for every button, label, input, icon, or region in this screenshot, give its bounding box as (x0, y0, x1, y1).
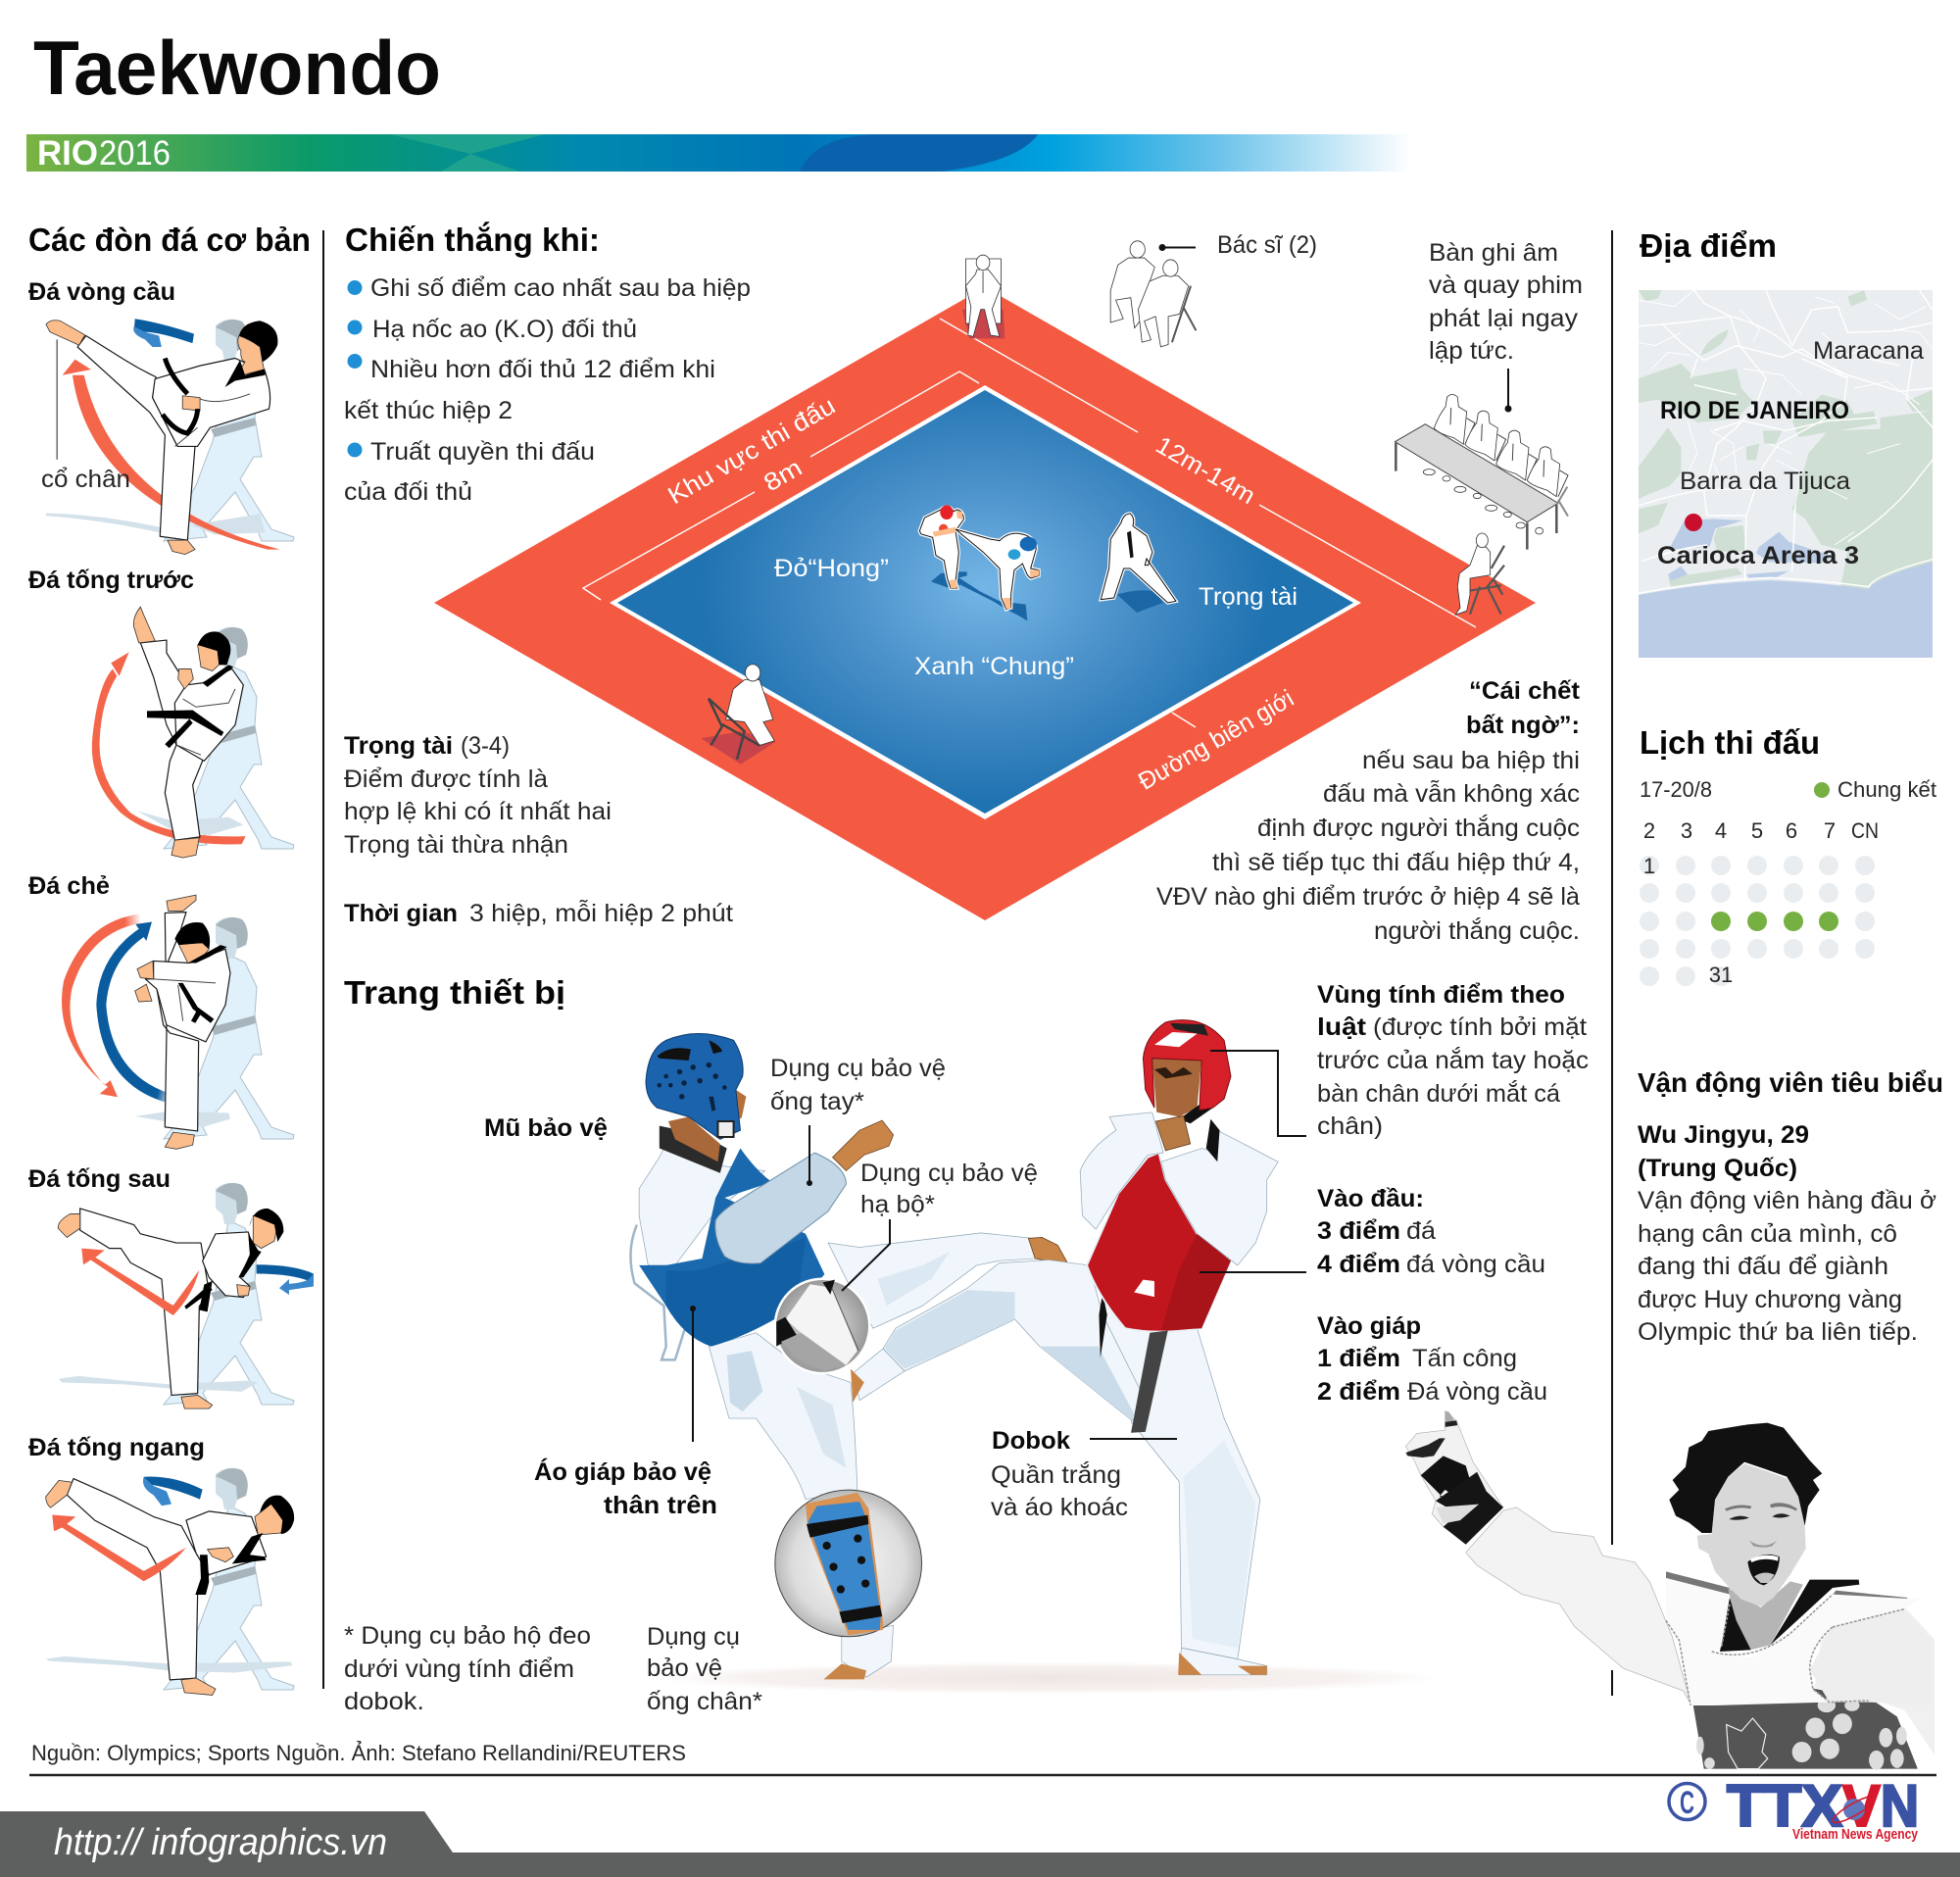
court label: boundary line: Đường biên giới (1134, 684, 1298, 796)
figure: side kick (46, 1468, 294, 1695)
logo: TTXVN: V (1842, 1773, 1881, 1839)
text: referee note: (3-4) (461, 732, 510, 760)
heading: schedule: Lịch thi đấu (1640, 724, 1820, 761)
recording table and judges (1395, 394, 1568, 550)
text: athlete bio: Wu Jingyu, 29 (1638, 1121, 1809, 1149)
court label: red: Đỏ“Hong” (774, 555, 889, 582)
doctors (1110, 241, 1196, 347)
label: chest protector: thân trên (604, 1492, 717, 1519)
label: helmet: Mũ bảo vệ (484, 1114, 608, 1142)
text: sudden death: VĐV nào ghi điểm trước ở hiệp 4 sẽ là (1156, 883, 1580, 911)
text: sudden death: “Cái chết (1469, 677, 1581, 705)
text: scoring zone: luật (1317, 1013, 1367, 1041)
label: groin guard (842, 1160, 1038, 1291)
text: head points: 4 điểm (1317, 1251, 1400, 1278)
text: sudden death: người thắng cuộc. (1374, 916, 1580, 945)
text: head points: đá (1406, 1217, 1436, 1245)
divider: right column (1611, 230, 1613, 1696)
text: armor points: Tấn công (1412, 1345, 1517, 1372)
label: recording table: phát lại ngay (1429, 305, 1579, 332)
text: athlete bio: Vận động viên hàng đầu ở (1638, 1187, 1936, 1214)
text: sudden death: định được người thắng cuộc (1257, 814, 1580, 842)
figure: roundhouse kick (41, 319, 294, 555)
text: head points (1317, 1185, 1545, 1278)
court diagram (434, 241, 1568, 920)
footer band: http:// infographics.vn (54, 1822, 387, 1863)
note: protective gear: * Dụng cụ bảo hộ đeo (344, 1622, 591, 1650)
figure: roundhouse kick: cổ chân (41, 466, 130, 493)
text: scoring zone: Vùng tính điểm theo (1317, 981, 1565, 1009)
text: referee note: Điểm được tính là (344, 766, 548, 793)
text: scoring zone: chân) (1317, 1112, 1383, 1140)
label: recording table: Bàn ghi âm (1429, 239, 1558, 267)
figure: axe kick (62, 895, 294, 1149)
list: winning conditions: Hạ nốc ao (K.O) đối thủ (372, 316, 637, 343)
schedule calendar: 3 (1681, 818, 1692, 843)
text: armor points: Đá vòng cầu (1407, 1378, 1547, 1406)
label: shin guard: Dụng cụ (647, 1623, 740, 1651)
label: side kick: Đá tống ngang (28, 1434, 205, 1461)
text: referee note: Trọng tài (344, 732, 453, 760)
heading: winning conditions: Chiến thắng khi: (345, 222, 600, 258)
text: head points: Vào đầu: (1317, 1185, 1424, 1212)
court label: blue: Xanh “Chung” (914, 653, 1074, 680)
schedule calendar: 2 (1643, 818, 1655, 843)
court figures (701, 241, 1196, 765)
judge top (962, 255, 1004, 338)
note: protective gear: dobok. (344, 1688, 424, 1715)
judge bottom-left (701, 665, 776, 765)
text: scoring zone: bàn chân dưới mắt cá (1317, 1079, 1560, 1108)
label: dobok (991, 1427, 1177, 1521)
label: shin guard (647, 1623, 762, 1715)
source: Nguồn: Olympics; Sports Nguồn. Ảnh: Stefano Rellandini/REUTERS (31, 1741, 686, 1765)
text: time (344, 899, 733, 927)
map: RIO DE JANEIRO (1660, 397, 1849, 424)
label: doctors (1158, 231, 1317, 259)
text: referee note: hợp lệ khi có ít nhất hai (344, 798, 612, 825)
text: head points: đá vòng cầu (1406, 1251, 1545, 1278)
list: winning conditions: kết thúc hiệp 2 (344, 397, 513, 424)
text: time: Thời gian (344, 900, 458, 927)
banner: Rio 2016 (26, 134, 1411, 173)
inset: shin guard (775, 1490, 922, 1637)
text: referee note: Trọng tài thừa nhận (344, 831, 568, 859)
text: sudden death: nếu sau ba hiệp thi (1362, 747, 1580, 774)
text: armor points: 1 điểm (1317, 1345, 1400, 1372)
court label: 8m: 8m (760, 454, 807, 497)
text: athlete bio: (Trung Quốc) (1638, 1155, 1797, 1182)
label: dobok: và áo khoác (991, 1494, 1128, 1521)
text: scoring zone (1317, 981, 1589, 1140)
text: athlete bio: hạng cân của mình, cô (1638, 1220, 1897, 1248)
figure: front kick (92, 607, 294, 858)
text: sudden death: đấu mà vẫn không xác (1323, 779, 1580, 808)
list: winning conditions: Nhiều hơn đối thủ 12 điểm khi (370, 356, 715, 383)
heading: venue: Địa điểm (1640, 227, 1777, 264)
logo: copyright (1669, 1784, 1705, 1820)
note: protective gear: dưới vùng tính điểm (344, 1655, 574, 1683)
label: forearm guard (770, 1055, 946, 1186)
map: Barra da Tijuca (1680, 468, 1850, 495)
text: time: 3 hiệp, mỗi hiệp 2 phút (469, 899, 733, 927)
inset: groin guard (775, 1279, 869, 1373)
label: shin guard: bảo vệ (647, 1655, 722, 1682)
label: recording table: và quay phim (1429, 272, 1583, 299)
schedule calendar: Chung kết (1838, 777, 1936, 802)
label: dobok: Dobok (992, 1427, 1070, 1455)
schedule calendar: 7 (1824, 818, 1836, 843)
label: roundhouse kick: Đá vòng cầu (28, 278, 175, 306)
logo: TTXVN: TTX (1727, 1773, 1842, 1839)
text: athlete bio: được Huy chương vàng (1638, 1286, 1902, 1313)
heading: featured athlete: Vận động viên tiêu biểu (1638, 1067, 1943, 1098)
banner: Rio 2016: 2016 (99, 134, 171, 173)
title: Taekwondo (33, 25, 441, 111)
label: axe kick: Đá chẻ (28, 872, 110, 900)
schedule calendar: 17-20/8 (1640, 777, 1712, 802)
banner: Rio 2016: RIO (37, 134, 98, 173)
label: chest protector (534, 1306, 717, 1519)
list: winning conditions: Ghi số điểm cao nhất sau ba hiệp (370, 274, 751, 302)
text: sudden death: thì sẽ tiếp tục thi đấu hiệp thứ 4, (1212, 849, 1580, 876)
text: head points: 3 điểm (1317, 1217, 1400, 1245)
text: athlete bio (1638, 1121, 1936, 1346)
court label: competition area: Khu vực thi đấu (663, 392, 840, 510)
schedule calendar: 4 (1715, 818, 1727, 843)
text: athlete bio: Olympic thứ ba liên tiếp. (1638, 1318, 1918, 1346)
leader: scoring zone (1210, 1051, 1306, 1136)
label: chest protector: Áo giáp bảo vệ (534, 1457, 711, 1486)
map: Maracana (1813, 337, 1924, 365)
heading: equipment: Trang thiết bị (344, 974, 565, 1011)
schedule calendar: 1 (1643, 854, 1655, 878)
schedule calendar (1640, 777, 1936, 987)
divider: left column (322, 230, 324, 1689)
schedule calendar: CN (1851, 818, 1879, 843)
schedule calendar: 6 (1786, 818, 1797, 843)
judge right (1455, 533, 1504, 615)
map (1639, 290, 1933, 658)
text: athlete bio: đang thi đấu để giành (1638, 1253, 1888, 1280)
list: winning conditions: Truất quyền thi đấu (370, 438, 595, 466)
illustration: blue fighter (630, 1033, 1069, 1679)
text: sudden death (1156, 677, 1581, 945)
court label: referee: Trọng tài (1199, 583, 1298, 611)
text: scoring zone: trước của nắm tay hoặc (1317, 1046, 1589, 1074)
text: scoring zone: (được tính bởi mặt (1373, 1013, 1587, 1041)
label: forearm guard: Dụng cụ bảo vệ (770, 1055, 946, 1082)
schedule calendar: 5 (1751, 818, 1763, 843)
label: groin guard: Dụng cụ bảo vệ (860, 1160, 1038, 1187)
logo: TTXVN: N (1881, 1773, 1919, 1839)
leader: body armor (1200, 1271, 1306, 1273)
label: shin guard: ống chân* (647, 1688, 762, 1715)
court label: 12m-14m: 12m-14m (1152, 431, 1259, 510)
label: recording table (1429, 239, 1583, 412)
label: back kick: Đá tống sau (28, 1165, 171, 1193)
label: front kick: Đá tống trước (28, 567, 194, 594)
illustration: red fighter (851, 1020, 1278, 1675)
list: winning conditions (344, 274, 751, 506)
text: armor points: 2 điểm (1317, 1378, 1400, 1406)
text: referee note (344, 732, 612, 859)
footer rule (29, 1774, 1936, 1776)
schedule calendar: 31 (1709, 963, 1733, 987)
map: Carioca Arena 3 (1657, 542, 1859, 569)
text: sudden death: bất ngờ”: (1466, 712, 1580, 739)
photo: athlete (1405, 1410, 1935, 1770)
text: armor points: Vào giáp (1317, 1312, 1421, 1340)
label: groin guard: hạ bộ* (860, 1191, 935, 1218)
text: armor points (1317, 1312, 1547, 1406)
heading: basic kicks: Các đòn đá cơ bản (28, 222, 311, 258)
logo: copyright: C (1680, 1785, 1694, 1820)
logo: TTXVN: Vietnam News Agency (1792, 1826, 1919, 1843)
label: dobok: Quần trắng (991, 1460, 1121, 1489)
logo: TTXVN (1727, 1773, 1919, 1843)
label: doctors: Bác sĩ (2) (1217, 231, 1317, 259)
label: forearm guard: ống tay* (770, 1088, 864, 1115)
note: protective gear (344, 1622, 591, 1715)
fighters and referee on mat (919, 505, 1176, 620)
ground shadow (657, 1662, 1441, 1694)
figure: back kick (58, 1183, 314, 1408)
footer band (0, 1811, 1960, 1877)
list: winning conditions: của đối thủ (344, 478, 472, 506)
label: recording table: lập tức. (1429, 337, 1514, 365)
